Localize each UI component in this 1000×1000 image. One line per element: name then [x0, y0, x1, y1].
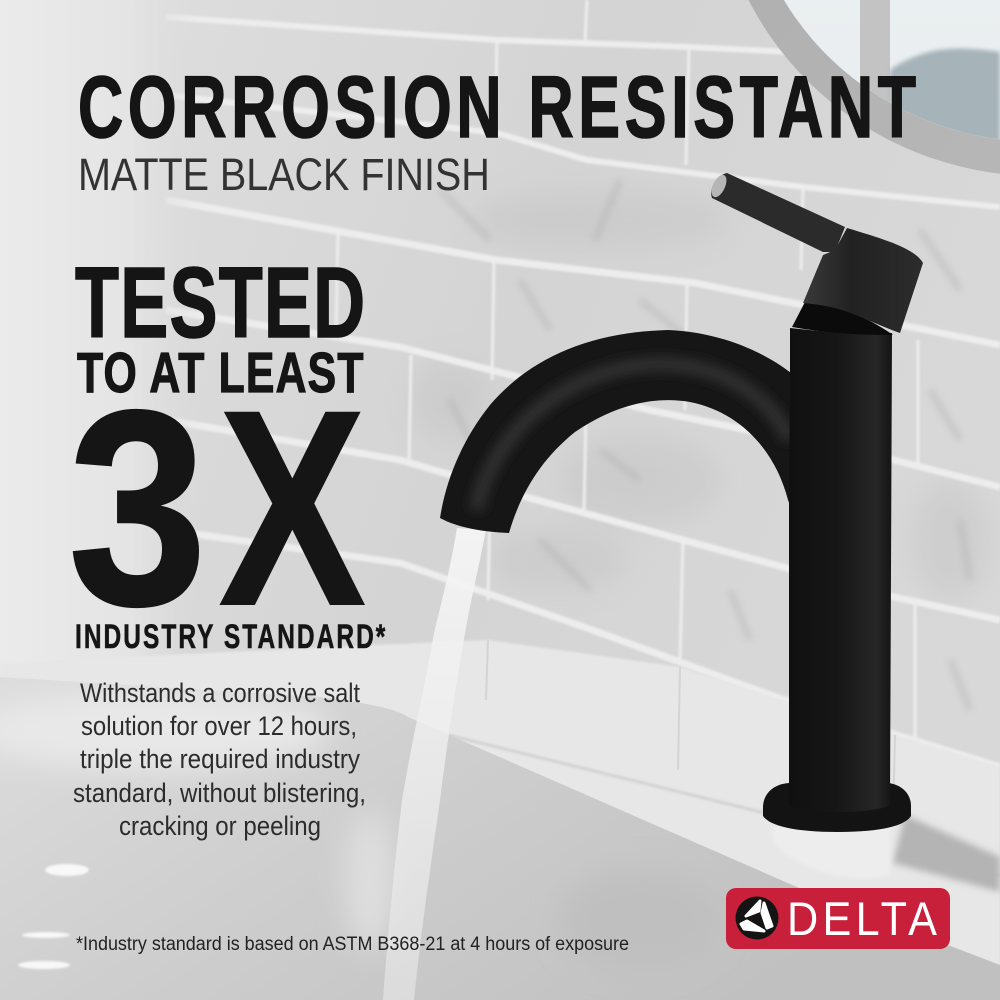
handle lever — [711, 173, 845, 252]
claim: 3X — [68, 353, 365, 664]
water stream — [383, 528, 486, 1000]
body — [789, 328, 892, 812]
lower row tile joints — [486, 640, 895, 820]
wordmark: DELTA — [787, 892, 938, 945]
shadow on counter — [893, 815, 1000, 892]
description text: cracking or peeling — [119, 811, 321, 841]
description text — [73, 678, 366, 841]
basin highlights — [0, 690, 720, 970]
icon: Delta triangle mark — [741, 901, 772, 931]
footnote: *Industry standard is based on ASTM B368-21 at 4 hours of exposure — [76, 934, 629, 955]
claim: 3X: 3 — [68, 354, 207, 664]
spout sheen — [476, 364, 790, 510]
claim: 3X: X — [219, 353, 365, 664]
counter back edge — [440, 733, 1000, 875]
claim: tested: TESTED — [75, 247, 365, 359]
faucet — [440, 173, 1000, 892]
sink basin — [0, 677, 1000, 1000]
reflection under base — [770, 825, 890, 878]
base plate — [763, 783, 911, 832]
lever tip — [708, 173, 730, 199]
Delta logo — [726, 888, 950, 949]
description text: Withstands a corrosive salt — [80, 678, 360, 708]
description text: standard, without blistering, — [73, 778, 366, 808]
subtitle: MATTE BLACK FINISH — [78, 150, 490, 200]
description text: triple the required industry — [80, 744, 360, 774]
title: CORROSION RESISTANT — [78, 59, 916, 157]
mirror with round frame — [748, 0, 1000, 174]
claim: industry standard: INDUSTRY STANDARD* — [75, 618, 386, 656]
tile grout lines — [166, 0, 1000, 767]
collar — [792, 300, 893, 335]
left blurred wall panel — [0, 0, 200, 680]
spout — [440, 330, 795, 533]
claim: to at least: TO AT LEAST — [77, 340, 364, 404]
handle cap — [803, 228, 923, 333]
description text: solution for over 12 hours, — [81, 711, 357, 741]
drain glints — [18, 864, 89, 969]
lower white tile band and counter — [0, 640, 1000, 1000]
